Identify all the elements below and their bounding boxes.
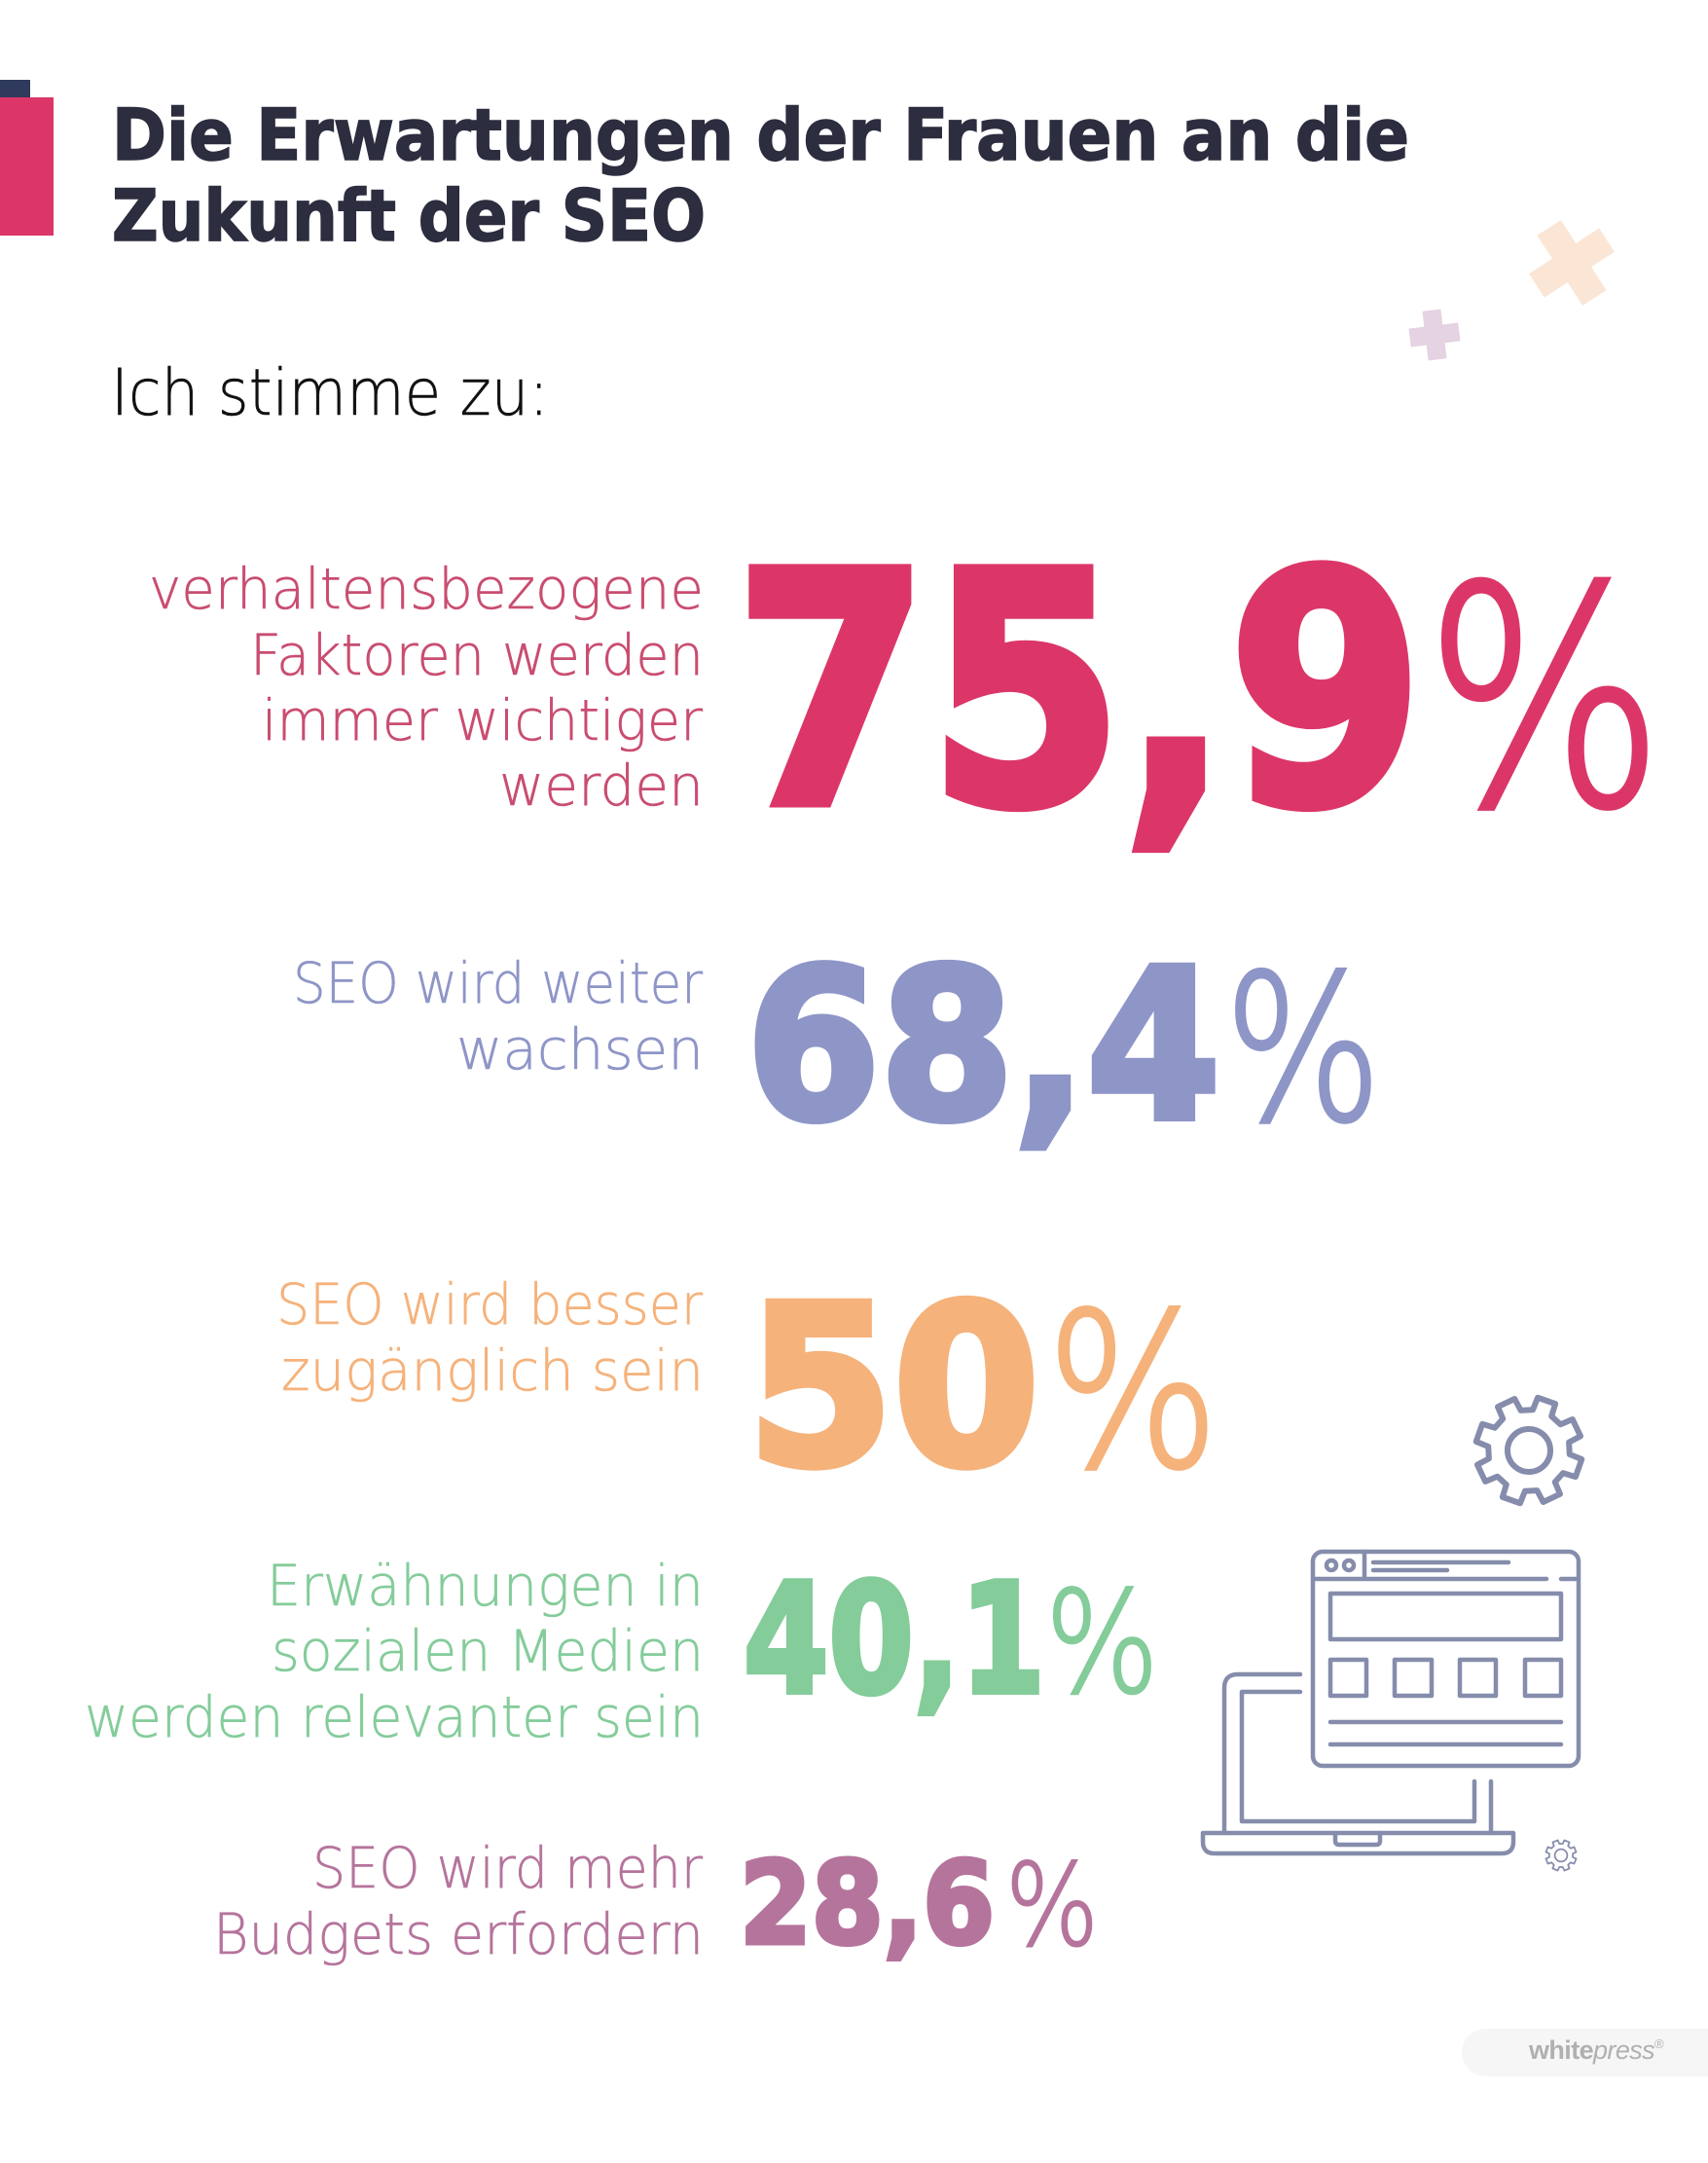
icon: small gear — [1545, 1840, 1577, 1871]
value: 28,6%: 28,6 — [740, 1837, 995, 1970]
value: 50%: % — [1046, 1267, 1219, 1517]
value: 40,1%: % — [1045, 1561, 1159, 1726]
icon: browser window — [1313, 1552, 1579, 1766]
value: 75,9%: % — [1425, 524, 1664, 876]
value: 75,9%: 75,9 — [735, 507, 1423, 878]
label: accessibility — [276, 1271, 704, 1404]
label: accessibility: zugänglich sein — [281, 1338, 704, 1404]
value: 50% — [747, 1260, 1219, 1517]
label: behavioural factors — [149, 556, 704, 819]
label: SEO growth: SEO wird weiter — [293, 950, 703, 1016]
stat: 40,1% social media — [85, 1551, 1159, 1750]
stat: 75,9% behavioural factors — [149, 507, 1664, 878]
label: behavioural factors: Faktoren werden — [250, 622, 704, 688]
icon: header accent bars — [0, 80, 54, 236]
label: budgets — [213, 1835, 704, 1967]
label: social media: werden relevanter sein — [85, 1684, 704, 1750]
icon: peach cross — [1514, 205, 1629, 320]
label: behavioural factors: immer wichtiger — [262, 687, 703, 753]
stat: 28,6% budgets — [213, 1835, 1099, 1972]
label: behavioural factors: werden — [499, 752, 704, 819]
label: budgets: Budgets erfordern — [213, 1901, 704, 1967]
title — [112, 94, 1409, 258]
label: SEO growth — [293, 950, 704, 1082]
stat: 50% accessibility — [276, 1260, 1219, 1517]
label: accessibility: SEO wird besser — [276, 1271, 703, 1338]
value: 68,4%: 68,4 — [746, 926, 1220, 1167]
subtitle: Ich stimme zu: — [111, 355, 549, 430]
value: 50%: 50 — [747, 1260, 1039, 1516]
icon: lilac cross — [1407, 308, 1462, 362]
label: behavioural factors: verhaltensbezogene — [149, 556, 704, 622]
label: budgets: SEO wird mehr — [312, 1835, 703, 1901]
icon: large gear — [1474, 1396, 1583, 1505]
logo: whitepress badge — [1462, 2029, 1708, 2076]
label: social media: sozialen Medien — [272, 1618, 704, 1684]
title: Die Erwartungen der Frauen an die — [112, 94, 1409, 177]
title: Zukunft der SEO — [112, 175, 706, 258]
logo: whitepress badge: ® — [1654, 2036, 1664, 2051]
label: SEO growth: wachsen — [456, 1016, 704, 1082]
label: social media — [85, 1553, 704, 1750]
value: 28,6%: % — [1005, 1839, 1099, 1972]
label: social media: Erwähnungen in — [267, 1553, 704, 1619]
icon: laptop — [1203, 1674, 1513, 1853]
logo: whitepress badge: whitepress — [1529, 2035, 1654, 2065]
stat: 68,4% SEO growth — [293, 926, 1382, 1168]
value: 68,4%: % — [1224, 933, 1382, 1168]
value: 40,1%: 40,1 — [744, 1551, 1045, 1728]
